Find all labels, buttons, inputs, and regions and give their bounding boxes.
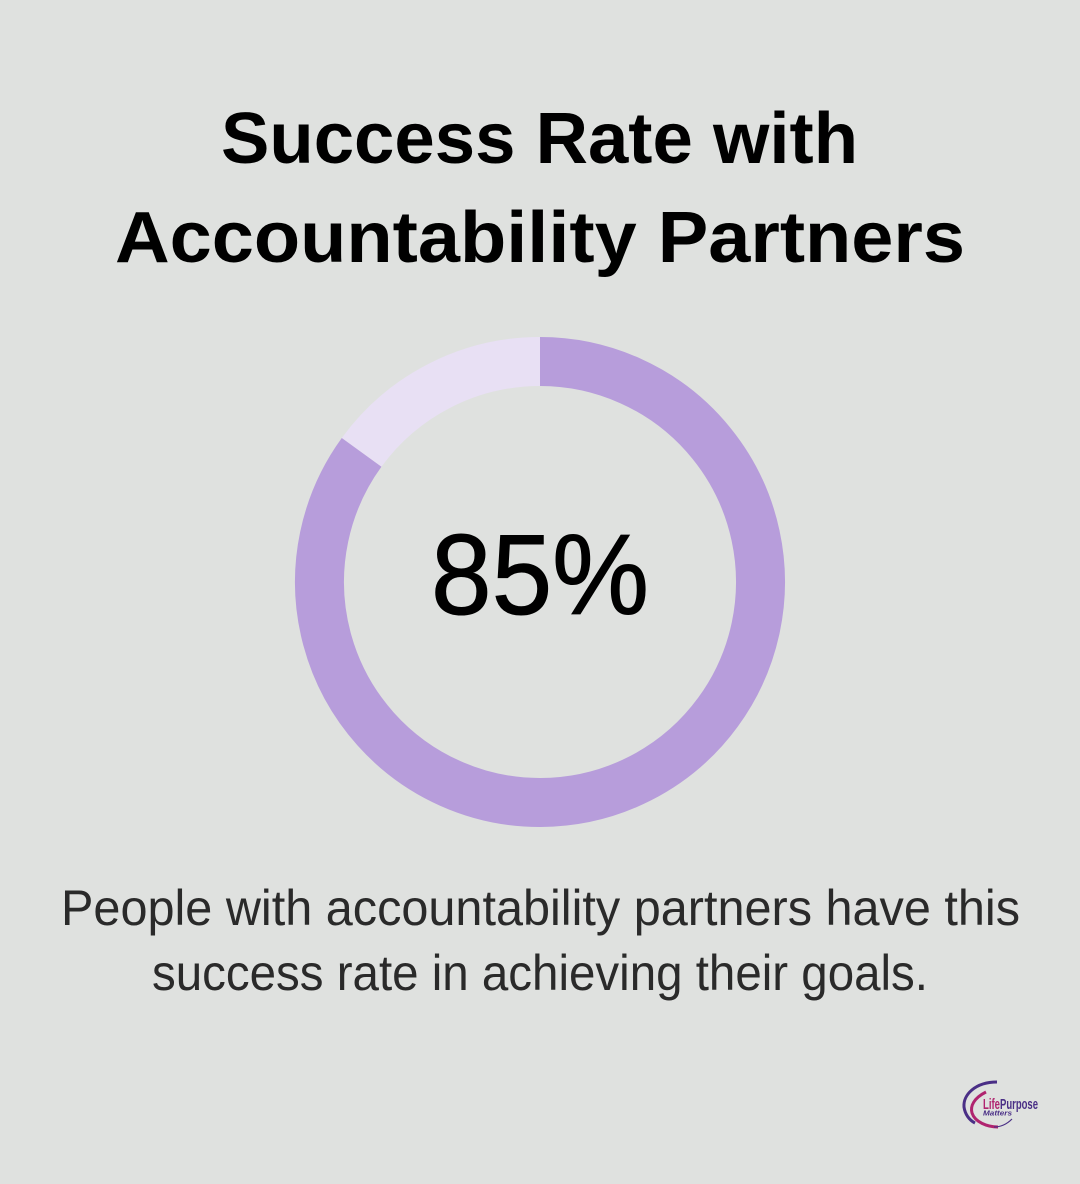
logo inner swoosh bbox=[972, 1092, 998, 1127]
logo outer swoosh bbox=[964, 1082, 997, 1123]
description text bbox=[61, 880, 1020, 1001]
logo: Life Purpose Matters: Purpose bbox=[1000, 1096, 1038, 1113]
logo: Life Purpose Matters: Matters bbox=[983, 1110, 1012, 1118]
center value: 85% bbox=[431, 512, 649, 639]
logo: Life Purpose Matters bbox=[964, 1082, 1038, 1127]
donut chart: 85% bbox=[319, 362, 760, 802]
title: Success Rate with bbox=[221, 99, 858, 179]
remaining 15% arc bbox=[362, 362, 540, 452]
description text: People with accountability partners have this bbox=[61, 880, 1020, 936]
title: Accountability Partners bbox=[115, 198, 965, 278]
filled 85% arc bbox=[319, 362, 760, 802]
logo lower line bbox=[994, 1119, 1012, 1127]
description text: success rate in achieving their goals. bbox=[152, 945, 928, 1001]
title bbox=[115, 99, 965, 278]
logo wordmark: Life bbox=[983, 1096, 1000, 1113]
